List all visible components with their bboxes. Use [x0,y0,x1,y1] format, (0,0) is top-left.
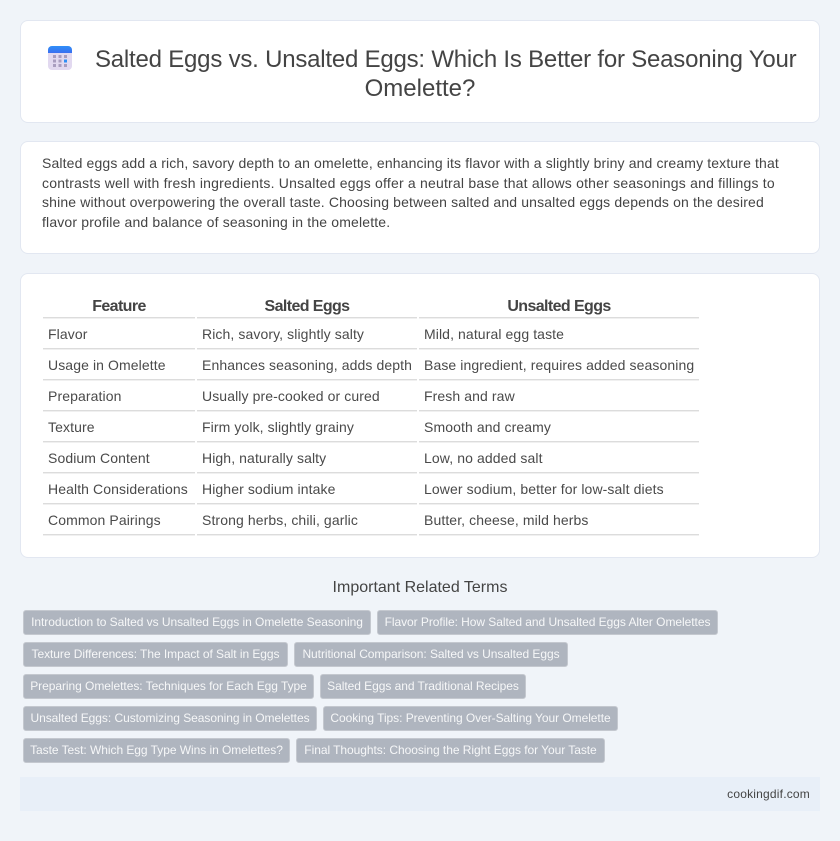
related terms tags: Cooking Tips: Preventing Over-Salting Your Omelette [330,711,611,725]
comparison table: Fresh and raw [424,388,515,404]
comparison table: Preparation [48,388,121,404]
intro paragraph: contrasts well with fresh ingredients. Unsalted eggs offer a neutral base that allows other seasonings and fillings to [42,175,775,191]
related terms tags [23,610,718,763]
title: Salted Eggs vs. Unsalted Eggs: Which Is Better for Seasoning Your [95,46,796,73]
related terms tags: Taste Test: Which Egg Type Wins in Omelettes? [30,743,283,757]
title [95,46,796,102]
intro paragraph: shine without overpowering the overall taste. Choosing between salted and unsalted eggs depends on the desired [42,194,764,210]
related terms tags: Preparing Omelettes: Techniques for Each Egg Type [30,679,307,693]
comparison table: Salted Eggs [264,298,349,315]
comparison table: Strong herbs, chili, garlic [202,512,358,528]
intro paragraph: Salted eggs add a rich, savory depth to an omelette, enhancing its flavor with a slightly briny and creamy texture that [42,155,779,171]
comparison table: Butter, cheese, mild herbs [424,512,588,528]
comparison table: Mild, natural egg taste [424,326,564,342]
comparison table: Lower sodium, better for low-salt diets [424,481,664,497]
comparison table: Firm yolk, slightly grainy [202,419,354,435]
related terms tags: Final Thoughts: Choosing the Right Eggs for Your Taste [304,743,597,757]
header panel [20,20,820,123]
comparison table: Health Considerations [48,481,188,497]
comparison table: Usually pre-cooked or cured [202,388,380,404]
related terms heading: Important Related Terms [333,579,507,596]
intro paragraph: flavor profile and balance of seasoning in the omelette. [42,214,390,230]
comparison table [43,298,699,536]
comparison table: Sodium Content [48,450,150,466]
comparison table: Base ingredient, requires added seasoning [424,357,694,373]
comparison table: Feature [92,298,146,315]
comparison table: Smooth and creamy [424,419,551,435]
comparison table: Flavor [48,326,88,342]
related terms tags: Nutritional Comparison: Salted vs Unsalted Eggs [302,647,560,661]
footer source: cookingdif.com [727,787,810,801]
related terms tags: Introduction to Salted vs Unsalted Eggs in Omelette Seasoning [31,615,363,629]
intro text panel [20,141,820,254]
comparison table: Unsalted Eggs [507,298,611,315]
comparison table: Usage in Omelette [48,357,166,373]
comparison table panel [20,273,820,558]
comparison table: Common Pairings [48,512,161,528]
comparison table: Enhances seasoning, adds depth [202,357,412,373]
comparison table: High, naturally salty [202,450,326,466]
related terms tags: Salted Eggs and Traditional Recipes [327,679,519,693]
related terms tags: Texture Differences: The Impact of Salt in Eggs [32,647,280,661]
intro paragraph [42,155,779,230]
comparison table: Texture [48,419,95,435]
footer bar [20,777,820,811]
comparison table: Low, no added salt [424,450,543,466]
related terms tags: Unsalted Eggs: Customizing Seasoning in Omelettes [30,711,310,725]
comparison table: Higher sodium intake [202,481,336,497]
related terms tags: Flavor Profile: How Salted and Unsalted Eggs Alter Omelettes [385,615,710,629]
title: Omelette? [365,75,475,102]
icon: calendar [48,46,72,70]
comparison table: Rich, savory, slightly salty [202,326,364,342]
